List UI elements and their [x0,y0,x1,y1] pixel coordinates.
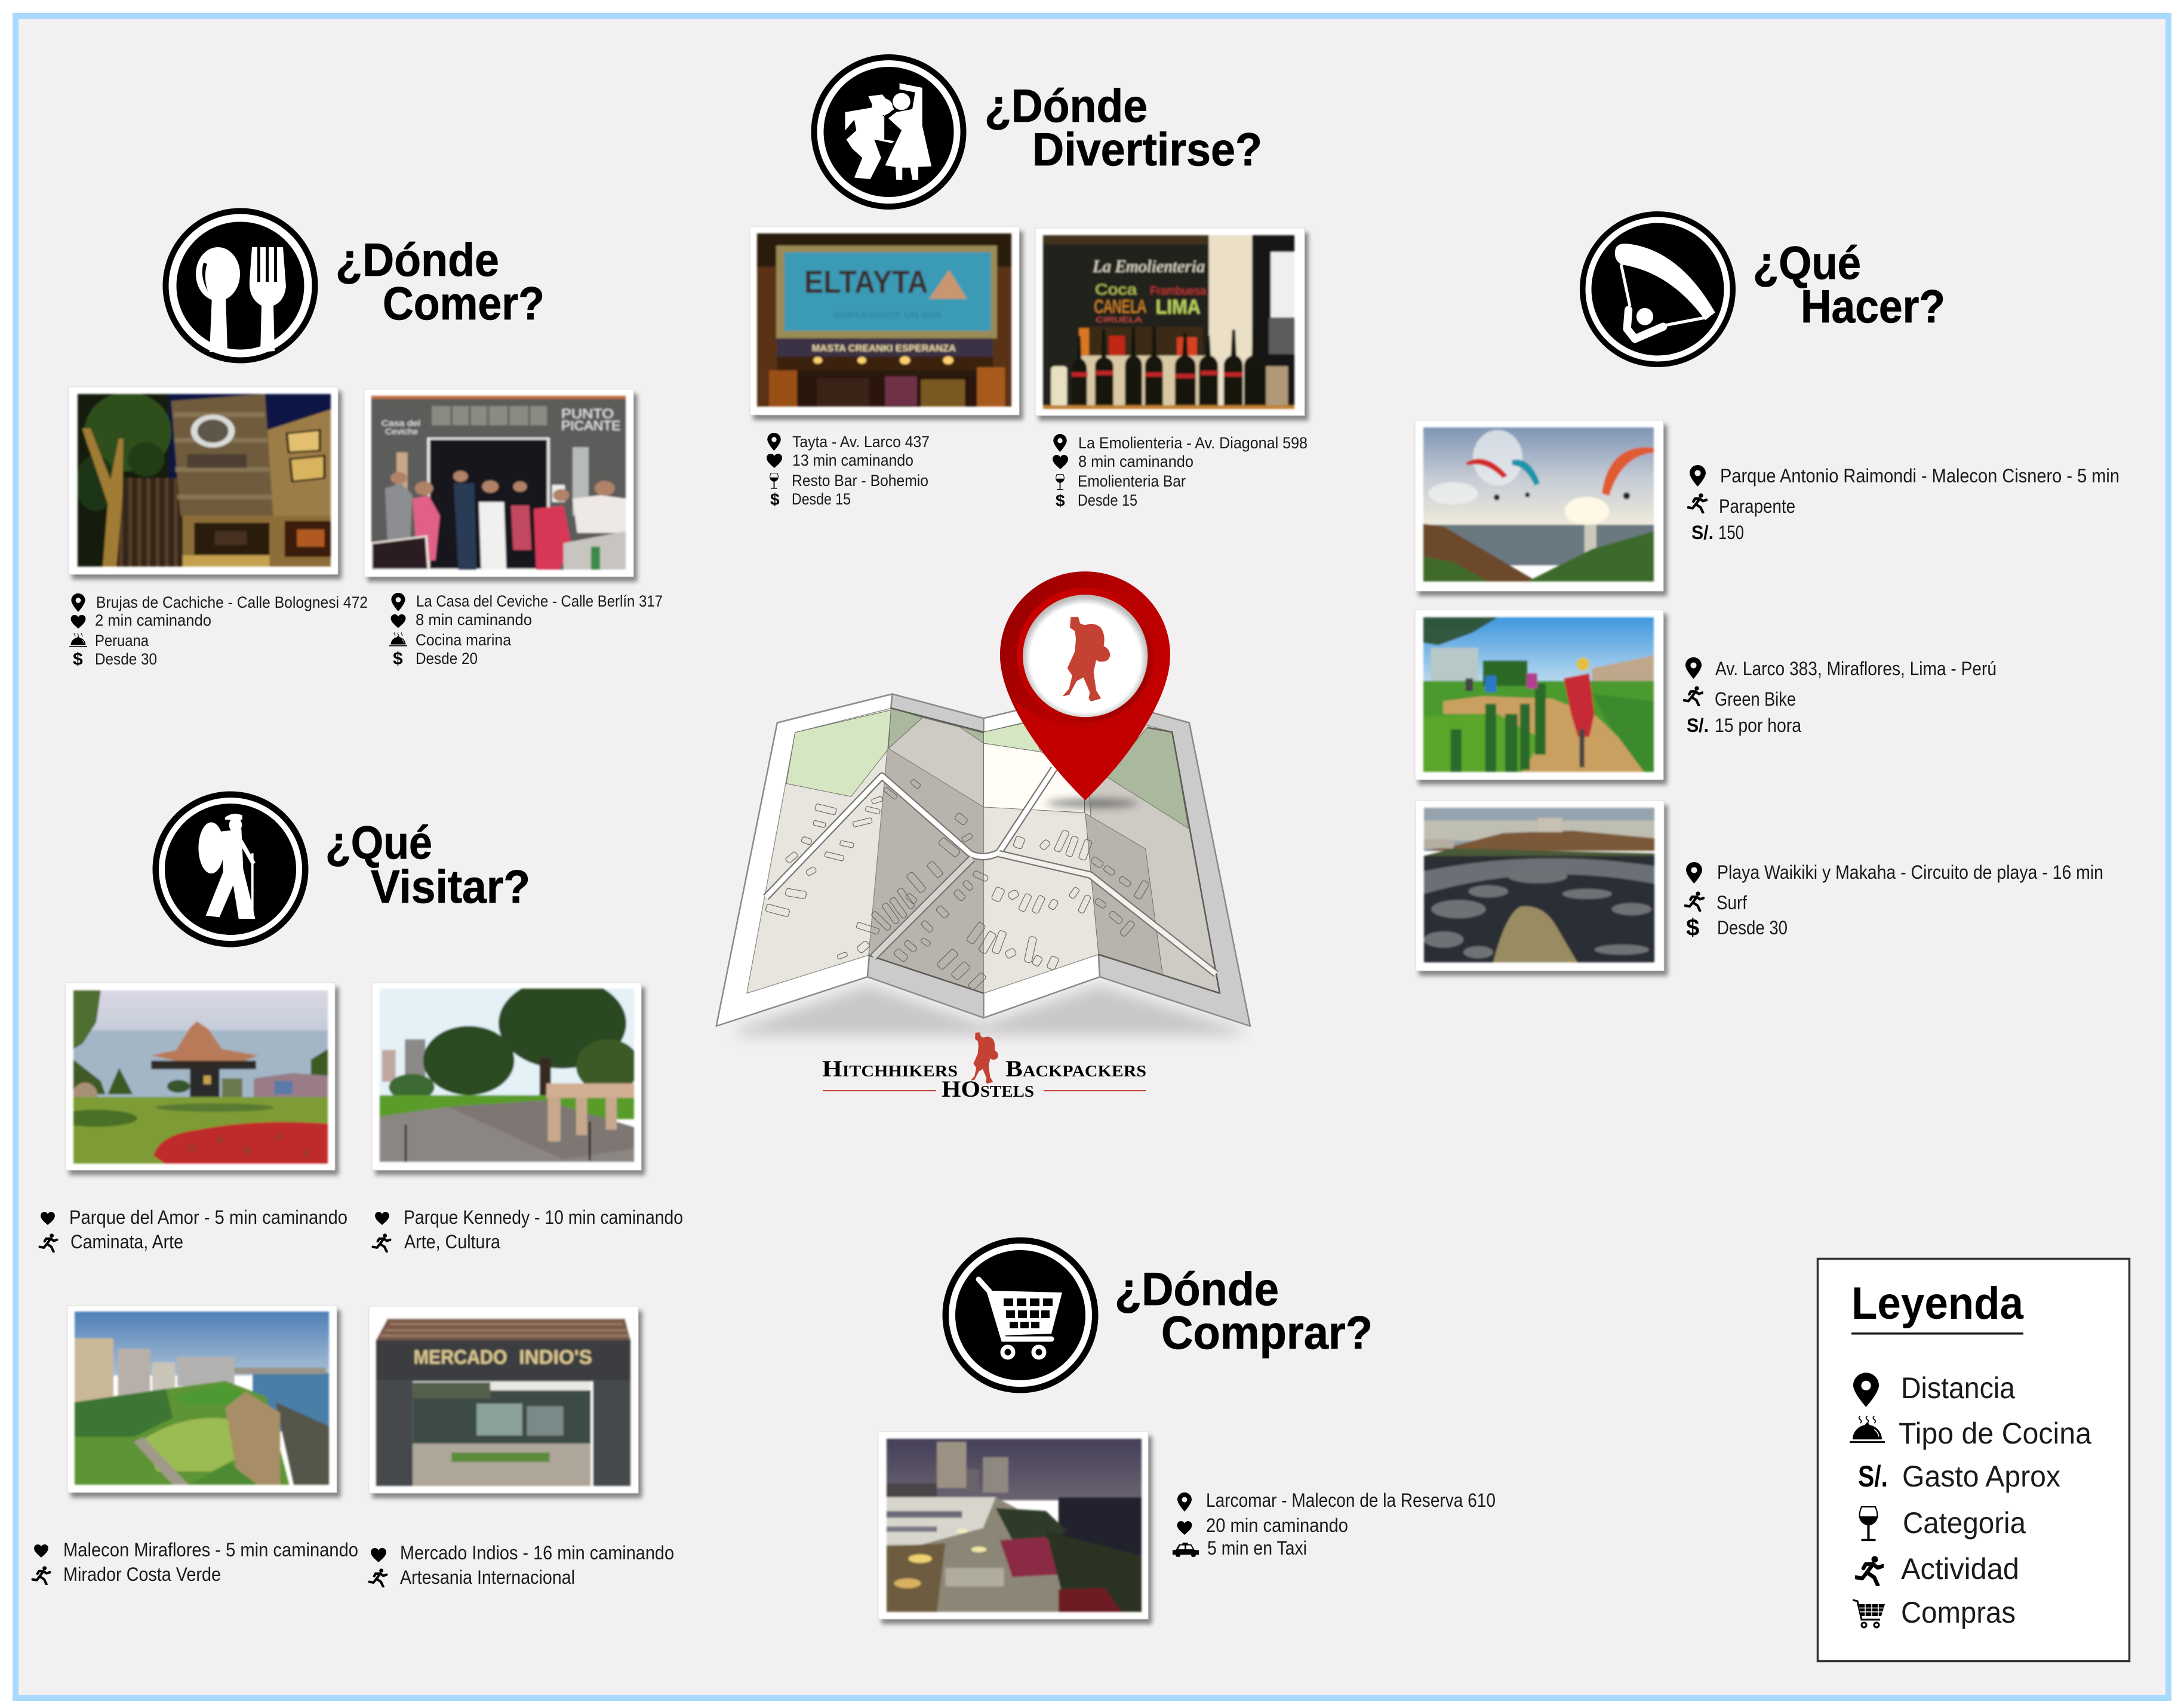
heading [336,233,545,330]
photo: La Casa del Ceviche: PUNTO [561,407,614,421]
text block: Larcomar: Larcomar - Malecon de la Reserva 610 [1206,1490,1496,1511]
map buildings [765,779,1150,990]
legend [1817,1258,2129,1661]
text block: parapente: Parapente [1719,496,1795,517]
photo: La Emolienteria: CANELA [1094,296,1146,317]
text block: La Emolienteria: La Emolienteria - Av. Diagonal 598 [1078,434,1308,452]
photo: La Emolienteria: Coca [1095,282,1137,298]
heading [1115,1263,1373,1359]
panel: donde comer [69,208,663,669]
legend item: compras: Compras [1901,1596,2016,1629]
icon: paraglider [1580,211,1736,367]
text block: Tayta: Resto Bar - Bohemio [792,472,928,490]
icon: hiker in pin [1062,617,1110,701]
heading: Divertirse? [1032,123,1262,176]
text block: surf: Desde 30 [1717,917,1788,938]
text block: La Casa del Ceviche [389,592,663,669]
photo: La Casa del Ceviche: Casa del [382,419,420,428]
text block: Larcomar [1173,1490,1496,1559]
legend item: categoria: Categoria [1903,1506,2026,1540]
text block: parapente: Parque Antonio Raimondi - Malecon Cisnero - 5 min [1720,465,2120,487]
logo: Hitchhikers Backpackers Hostels: Backpackers [1005,1056,1146,1082]
text block: green bike [1684,657,1997,736]
photo: El Tayta: ELTAYTA [804,264,928,300]
text block: surf: $ [1686,915,1699,941]
text block: Parque Kennedy: Parque Kennedy - 10 min caminando [404,1207,683,1228]
icon: spoon and fork [162,208,318,363]
text block: Mercado Indios [370,1542,674,1588]
photo: parapente [1415,420,1663,591]
text block: Tayta: Tayta - Av. Larco 437 [792,433,930,451]
text block: Parque del Amor: Caminata, Arte [70,1231,183,1252]
text block: La Casa del Ceviche: 8 min caminando [416,611,532,629]
text block: parapente: S/. [1691,522,1714,543]
folded map [716,694,1250,1026]
text block: Parque Kennedy: Arte, Cultura [404,1231,500,1252]
text block: parapente [1688,465,2120,543]
heading: ¿Qué [325,816,432,869]
text block: La Casa del Ceviche: $ [393,649,403,669]
photo: surf [1416,801,1664,971]
text block: La Casa del Ceviche: Desde 20 [416,650,478,667]
photo: Mercado Indios: MERCADO [414,1345,507,1368]
heading: Comer? [383,277,545,330]
icon: hiker [153,792,308,947]
text block: Tayta: Desde 15 [792,490,851,508]
photo: La Casa del Ceviche: Ceviche [385,427,418,436]
text block: La Emolienteria [1053,434,1308,510]
photo: green bike [1415,610,1663,780]
heading: ¿Dónde [1115,1263,1279,1315]
text block: green bike: Green Bike [1715,688,1796,710]
text block: Malecon Miraflores [33,1539,358,1585]
text block: La Emolienteria: 8 min caminando [1078,453,1193,470]
legend item: compras [1853,1596,2016,1629]
map roads [766,769,1216,974]
legend item: gasto aprox: Gasto Aprox [1902,1460,2060,1493]
photo: Parque del Amor [55,983,335,1170]
text block: Brujas de Cachiche [69,593,368,669]
text block: Brujas de Cachiche: Brujas de Cachiche - Calle Bolognesi 472 [96,593,368,611]
heading [985,79,1262,176]
text block: Parque Kennedy [373,1207,683,1252]
text block: Brujas de Cachiche: Desde 30 [95,650,157,668]
panel: que hacer [1415,211,2120,971]
text block: La Emolienteria: $ [1056,491,1065,510]
photo: La Emolienteria: Frambuesa [1150,284,1206,297]
heading: ¿Qué [1753,236,1861,289]
icon: shopping cart [942,1237,1099,1393]
text block: Malecon Miraflores: Mirador Costa Verde [63,1564,221,1585]
icon: logo hiker [971,1032,998,1084]
photo: La Casa del Ceviche [364,389,633,577]
text block: Tayta [767,433,930,509]
photo: La Emolienteria [1035,228,1305,416]
heading: ¿Dónde [985,79,1148,132]
text block: green bike: S/. [1687,715,1709,736]
text block: surf [1685,861,2103,941]
photo: Mercado Indios [369,1306,638,1493]
center map illustration [716,571,1250,1035]
logo: Hitchhikers Backpackers Hostels: Hitchhikers [822,1056,958,1082]
text block: Brujas de Cachiche: Peruana [95,632,149,650]
photo: El Tayta: MASTA CREANKI ESPERANZA [812,343,956,353]
photo: El Tayta [750,227,1019,415]
panel: que visitar [33,792,683,1588]
text block: Tayta: $ [770,490,780,509]
text block: Parque del Amor: Parque del Amor - 5 min caminando [69,1207,347,1228]
photo: La Emolienteria: LIMA [1156,295,1201,318]
panel: donde divertirse [750,54,1308,510]
text block: La Emolienteria: Desde 15 [1078,491,1137,509]
heading [325,816,530,913]
text block: Larcomar: 20 min caminando [1206,1515,1348,1536]
heading: Hacer? [1801,280,1945,333]
logo: Hitchhikers Backpackers Hostels: HOstels [942,1076,1034,1102]
text block: Larcomar: 5 min en Taxi [1207,1537,1307,1559]
legend item: distancia: Distancia [1901,1371,2015,1405]
photo: Parque Kennedy [372,978,641,1170]
text block: La Casa del Ceviche: La Casa del Ceviche - Calle Berlín 317 [416,592,663,610]
heading: ¿Dónde [336,233,499,286]
photo: El Tayta: SIMPLEMENTE UN BAR [833,310,941,320]
text block: surf: Surf [1717,892,1747,913]
heading: Visitar? [371,860,530,913]
photo: Larcomar [878,1432,1148,1619]
text block: Brujas de Cachiche: 2 min caminando [95,611,211,629]
photo: Mercado Indios: INDIO'S [519,1345,592,1368]
text block: La Emolienteria: Emolienteria Bar [1078,472,1186,490]
heading: Comprar? [1161,1306,1373,1359]
text block: green bike: 15 por hora [1715,715,1801,736]
text block: Malecon Miraflores: Malecon Miraflores - 5 min caminando [63,1539,358,1561]
heading [1753,236,1945,333]
text block: Brujas de Cachiche: $ [73,650,83,669]
photo: La Emolienteria: La Emolienteria [1093,257,1205,276]
pin shadow [1047,799,1138,807]
legend item: gasto aprox: S/. [1858,1460,1888,1493]
text block: La Casa del Ceviche: Cocina marina [416,631,512,649]
text block: Mercado Indios: Mercado Indios - 16 min caminando [400,1542,674,1564]
text block: green bike: Av. Larco 383, Miraflores, Lima - Perú [1715,658,1997,679]
text block: surf: Playa Waikiki y Makaha - Circuito de playa - 16 min [1717,861,2103,883]
logo: Hitchhikers Backpackers Hostels [822,1032,1146,1102]
legend item: distancia [1853,1371,2015,1407]
text block: Tayta: 13 min caminando [792,451,913,469]
icon: dancers [811,54,966,210]
legend item: actividad: Actividad [1901,1552,2019,1586]
text block: Parque del Amor [40,1207,347,1252]
text block: Mercado Indios: Artesania Internacional [400,1567,575,1588]
legend item: tipo de cocina: Tipo de Cocina [1899,1417,2091,1450]
location pin [1000,571,1170,801]
photo: Malecon Miraflores [67,1306,337,1492]
text block: parapente: 150 [1718,522,1744,543]
photo: La Emolienteria: CIRUELA [1096,316,1142,324]
map shadow [736,985,1242,1035]
photo: Brujas de Cachiche [69,387,338,574]
legend title: Leyenda [1851,1278,2024,1329]
panel: donde comprar [878,1237,1496,1619]
